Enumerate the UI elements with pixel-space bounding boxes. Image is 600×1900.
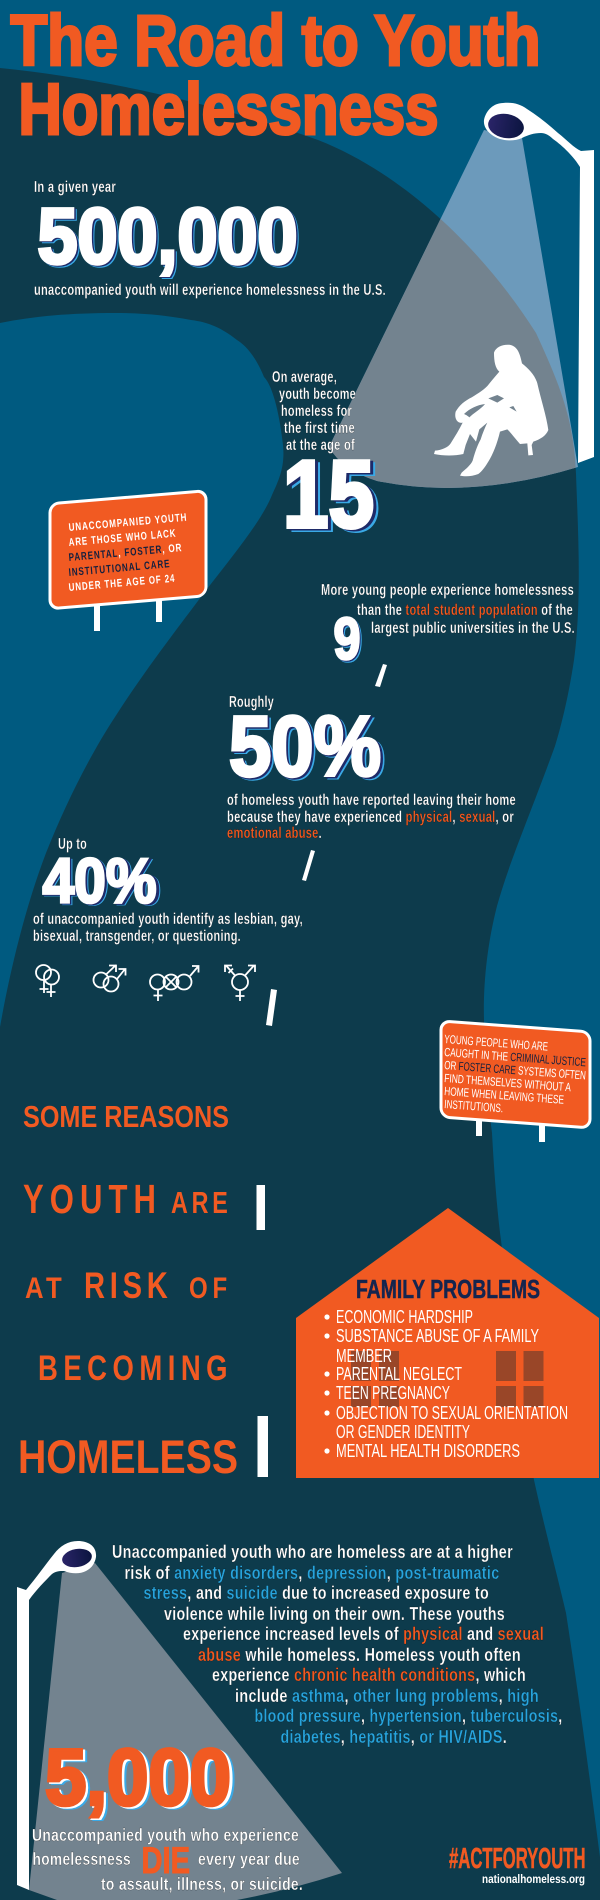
text block: health risks: stress, and suicide due to increased exposure to [144, 1583, 489, 1603]
street lamp [484, 103, 594, 463]
stat: 9 universities: than the total student population of the [357, 602, 573, 619]
text block: health risks: abuse while homeless. Homeless youth often [198, 1645, 521, 1665]
text block: health risks: blood pressure, hypertension, tuberculosis, [254, 1706, 562, 1726]
text block: health risks: risk of anxiety disorders, depression, post-traumatic [124, 1563, 500, 1583]
icon: bisexual symbol [150, 966, 198, 1001]
heading: some reasons youth are at risk of becoming homeless: ARE [171, 1185, 232, 1220]
house panel: family problems: MENTAL HEALTH DISORDERS [336, 1441, 520, 1461]
stat: 5,000 deaths: every year due [198, 1849, 300, 1869]
road sign: definition of unaccompanied youth: PARENTAL, FOSTER, OR [68, 542, 183, 564]
icon: lesbian symbol [36, 965, 59, 997]
stat: 5,000 deaths: to assault, illness, or suicide. [101, 1874, 303, 1894]
road sign: criminal justice and foster care: INSTITUTIONS. [444, 1097, 504, 1115]
stat: 50% [227, 694, 516, 842]
stat: 40%: bisexual, transgender, or questioning. [33, 928, 241, 945]
text block: health risks: experience increased levels of physical and sexual [183, 1624, 544, 1644]
road sign: definition of unaccompanied youth: UNDER THE AGE OF 24 [68, 573, 176, 594]
road dash 5 [258, 1416, 268, 1477]
road dash 2 [302, 850, 315, 881]
title [10, 2, 540, 150]
house panel: family problems: TEEN PREGNANCY [336, 1383, 450, 1403]
stat: 500,000: 500,000 [39, 192, 299, 281]
stat: age 15: On average, [272, 369, 337, 386]
stat: age 15 [272, 369, 379, 551]
stat: 40%: 40% [42, 846, 156, 916]
road dash 4 [256, 1185, 265, 1230]
road sign: definition of unaccompanied youth: INSTITUTIONAL CARE [68, 558, 171, 579]
silhouette of seated youth [434, 345, 548, 476]
house panel: family problems: ECONOMIC HARDSHIP [336, 1307, 473, 1327]
house panel: family problems: MEMBER [336, 1346, 392, 1366]
stat: 5,000 deaths: 5,000 [45, 1732, 231, 1822]
stat: 500,000: 500,000 [38, 191, 298, 280]
hashtag and website [449, 1843, 586, 1886]
stat: 50%: 50% [229, 700, 381, 794]
stat: 5,000 deaths: 5,000 [47, 1734, 234, 1823]
stat: 9 universities: 9 [334, 606, 360, 672]
stat: 40%: 40% [44, 848, 160, 918]
hashtag and website: nationalhomeless.org [482, 1874, 585, 1886]
stat: 40%: 40% [44, 848, 160, 918]
stat: 50%: 50% [230, 701, 384, 796]
stat: 40%: of unaccompanied youth identify as lesbian, gay, [33, 911, 303, 928]
house panel: family problems [296, 1208, 599, 1478]
stat: 50%: 50% [232, 702, 385, 797]
text block: health risks: experience chronic health conditions, which [212, 1665, 526, 1685]
text block: health risks: diabetes, hepatitis, or HIV/AIDS. [280, 1727, 507, 1747]
street lamp light cone [329, 130, 578, 488]
second lamp light cone [29, 1563, 342, 1900]
road sign: definition of unaccompanied youth: UNACCOMPANIED YOUTH [68, 512, 188, 534]
title: Homelessness [18, 70, 438, 150]
stat: 9 universities [321, 582, 575, 674]
stat: 5,000 deaths: DIE [142, 1840, 190, 1881]
road sign: criminal justice and foster care [441, 1021, 590, 1142]
stat: 40%: Up to [58, 836, 87, 853]
stat: 500,000: In a given year [34, 179, 116, 196]
icon: gay symbol [94, 965, 126, 992]
stat: age 15: 15 [283, 441, 374, 548]
stat: 50%: Roughly [229, 694, 274, 711]
stat: age 15: youth become [279, 386, 356, 403]
stat: age 15: homeless for [281, 403, 352, 420]
heading: some reasons youth are at risk of becoming homeless: RISK [84, 1265, 172, 1306]
stat: 9 universities: 9 [336, 608, 362, 674]
stat: age 15: at the age of [286, 437, 355, 454]
stat: 5,000 deaths: 5,000 [49, 1735, 236, 1824]
stat: 500,000: 500,000 [40, 193, 300, 282]
heading: some reasons youth are at risk of becoming homeless: YOUTH [23, 1176, 162, 1222]
stat: 5,000 deaths [32, 1732, 303, 1894]
icon: transgender symbol [225, 966, 255, 1001]
road dash 3 [266, 989, 277, 1026]
house panel: family problems: FAMILY PROBLEMS [356, 1274, 540, 1304]
stat: 50%: emotional abuse. [227, 825, 322, 842]
text block: health risks: Unaccompanied youth who are homeless are at a higher [112, 1542, 513, 1562]
heading: some reasons youth are at risk of becoming homeless: AT [25, 1272, 66, 1305]
heading: some reasons youth are at risk of becoming homeless: OF [189, 1272, 232, 1305]
road sign: criminal justice and foster care: YOUNG PEOPLE WHO ARE [444, 1032, 549, 1054]
stat: age 15: 15 [288, 444, 379, 551]
heading: some reasons youth are at risk of becoming homeless [18, 1099, 238, 1483]
stat: age 15: 15 [286, 442, 377, 550]
text block: health risks: include asthma, other lung problems, high [235, 1686, 539, 1706]
house panel: family problems: PARENTAL NEGLECT [336, 1364, 462, 1384]
stat: 9 universities: 9 [334, 607, 362, 673]
road dash 1 [375, 664, 387, 687]
second street lamp [17, 1541, 96, 1890]
road sign: definition of unaccompanied youth [50, 491, 206, 631]
stat: 500,000: unaccompanied youth will experience homelessness in the U.S. [34, 282, 386, 299]
heading: some reasons youth are at risk of becoming homeless: BECOMING [38, 1349, 233, 1388]
stat: 50%: because they have experienced physical, sexual, or [227, 809, 514, 826]
stat: 40% [33, 836, 303, 945]
text block: health risks [112, 1542, 562, 1747]
stat: 500,000 [34, 179, 386, 299]
stat: 5,000 deaths: Unaccompanied youth who experience [32, 1825, 299, 1845]
text block: health risks: violence while living on their own. These youths [164, 1604, 505, 1624]
house panel: family problems: OR GENDER IDENTITY [336, 1422, 470, 1442]
road sign: definition of unaccompanied youth: ARE THOSE WHO LACK [68, 528, 177, 549]
heading: some reasons youth are at risk of becoming homeless: HOMELESS [18, 1430, 238, 1483]
heading: some reasons youth are at risk of becoming homeless: SOME REASONS [23, 1099, 229, 1134]
stat: age 15: the first time [284, 420, 355, 437]
stat: 5,000 deaths: homelessness [32, 1849, 131, 1869]
